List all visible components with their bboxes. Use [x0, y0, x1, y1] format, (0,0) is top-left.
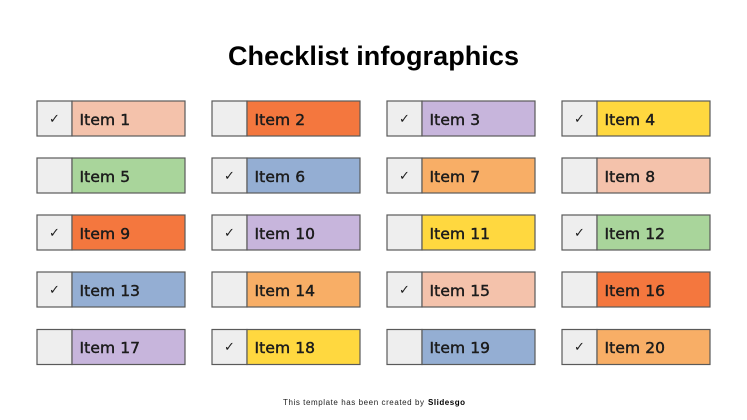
item 3 (checked): ✓ [399, 112, 410, 127]
item 11 [387, 215, 535, 250]
item 12 (checked) [562, 215, 710, 250]
item 4 (checked): ✓ [574, 112, 585, 127]
item 1 (checked) [37, 101, 185, 136]
item 5: Item 5 [80, 168, 130, 186]
item 12 (checked): ✓ [574, 226, 585, 241]
item 5 [37, 158, 185, 193]
item 1 (checked): ✓ [49, 112, 60, 127]
item 16 [562, 272, 710, 307]
item 10 (checked) [212, 215, 360, 250]
title: Checklist infographics [228, 41, 519, 71]
item 7 (checked): ✓ [399, 169, 410, 184]
item 17 [37, 330, 185, 364]
item 2 [212, 101, 360, 136]
item 13 (checked): ✓ [49, 283, 60, 298]
item 10 (checked): Item 10 [254, 225, 315, 243]
item 16: Item 16 [604, 282, 665, 300]
item 19: Item 19 [430, 339, 490, 357]
item 7 (checked) [387, 158, 535, 193]
item 15 (checked) [387, 272, 535, 307]
item 9 (checked) [37, 215, 185, 250]
item 8: Item 8 [604, 168, 655, 186]
item 3 (checked): Item 3 [430, 111, 480, 129]
item 18 (checked) [212, 330, 360, 364]
item 20 (checked): Item 20 [604, 339, 665, 357]
item 20 (checked): ✓ [574, 340, 585, 355]
item 15 (checked): ✓ [399, 283, 410, 298]
item 2: Item 2 [254, 111, 305, 129]
item 18 (checked): Item 18 [254, 339, 315, 357]
item 17: Item 17 [80, 339, 140, 357]
item 13 (checked): Item 13 [80, 282, 140, 300]
item 14 [212, 272, 360, 307]
item 7 (checked): Item 7 [430, 168, 480, 186]
item 12 (checked): Item 12 [604, 225, 665, 243]
item 4 (checked) [562, 101, 710, 136]
item 6 (checked): Item 6 [254, 168, 305, 186]
item 13 (checked) [37, 272, 185, 307]
item 9 (checked): Item 9 [80, 225, 130, 243]
item 14: Item 14 [254, 282, 315, 300]
item 11: Item 11 [430, 225, 490, 243]
item 6 (checked) [212, 158, 360, 193]
item 6 (checked): ✓ [224, 169, 235, 184]
footer credit: Slidesgo [428, 398, 465, 407]
item 3 (checked) [387, 101, 535, 136]
item 8 [562, 158, 710, 193]
item 20 (checked) [562, 330, 710, 364]
item 10 (checked): ✓ [224, 226, 235, 241]
item 4 (checked): Item 4 [604, 111, 655, 129]
item 18 (checked): ✓ [224, 340, 235, 355]
item 19 [387, 330, 535, 364]
item 1 (checked): Item 1 [80, 111, 130, 129]
footer credit: This template has been created by [283, 398, 424, 407]
item 15 (checked): Item 15 [430, 282, 490, 300]
item 9 (checked): ✓ [49, 226, 60, 241]
